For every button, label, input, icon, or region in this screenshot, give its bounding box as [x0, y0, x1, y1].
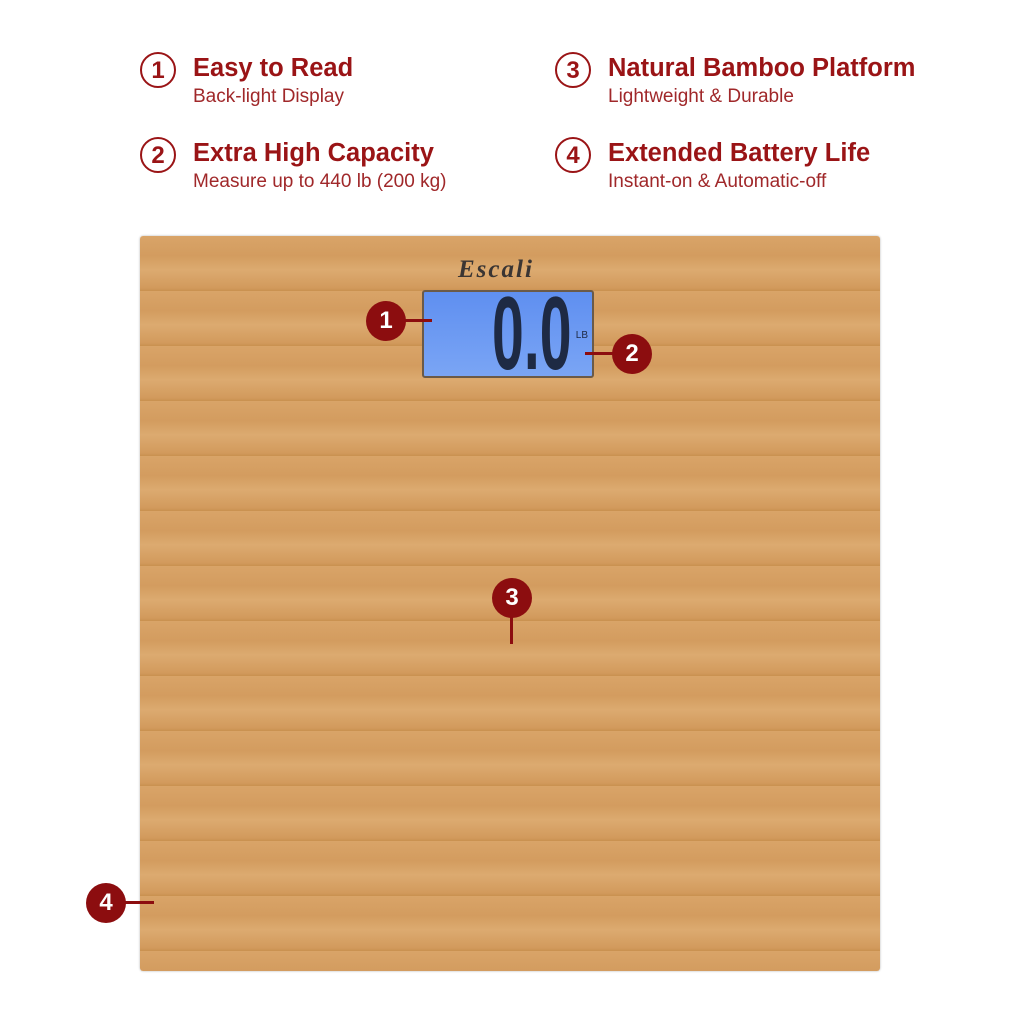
LCD display: 0.0: [492, 276, 572, 392]
marker 3: 3: [505, 584, 519, 611]
marker 1: [366, 301, 432, 341]
marker 3: [492, 578, 532, 644]
feature 3: 3: [566, 57, 580, 84]
feature 1: Back-light Display: [193, 86, 344, 107]
feature 4: Instant-on & Automatic-off: [608, 171, 826, 192]
feature 4: 4: [566, 142, 580, 169]
feature 1: [140, 52, 353, 107]
marker 4: 4: [99, 889, 113, 916]
feature 2: Measure up to 440 lb (200 kg): [193, 171, 446, 192]
scale platform: [140, 236, 880, 971]
feature 4: [555, 137, 870, 192]
feature 2: [140, 137, 446, 192]
feature 1: 1: [151, 57, 165, 84]
LCD display: [422, 290, 594, 378]
marker 4: [86, 883, 154, 923]
LCD display: LB: [576, 330, 588, 341]
feature 3: Natural Bamboo Platform: [608, 54, 915, 82]
feature 2: 2: [151, 142, 165, 169]
marker 2: [585, 334, 652, 374]
feature 1: Easy to Read: [193, 54, 353, 82]
logo: Escali: [458, 256, 534, 283]
feature 3: [555, 52, 915, 107]
feature 4: Extended Battery Life: [608, 139, 870, 167]
marker 1: 1: [379, 307, 393, 334]
feature 3: Lightweight & Durable: [608, 86, 794, 107]
feature 2: Extra High Capacity: [193, 139, 434, 167]
marker 2: 2: [625, 340, 639, 367]
